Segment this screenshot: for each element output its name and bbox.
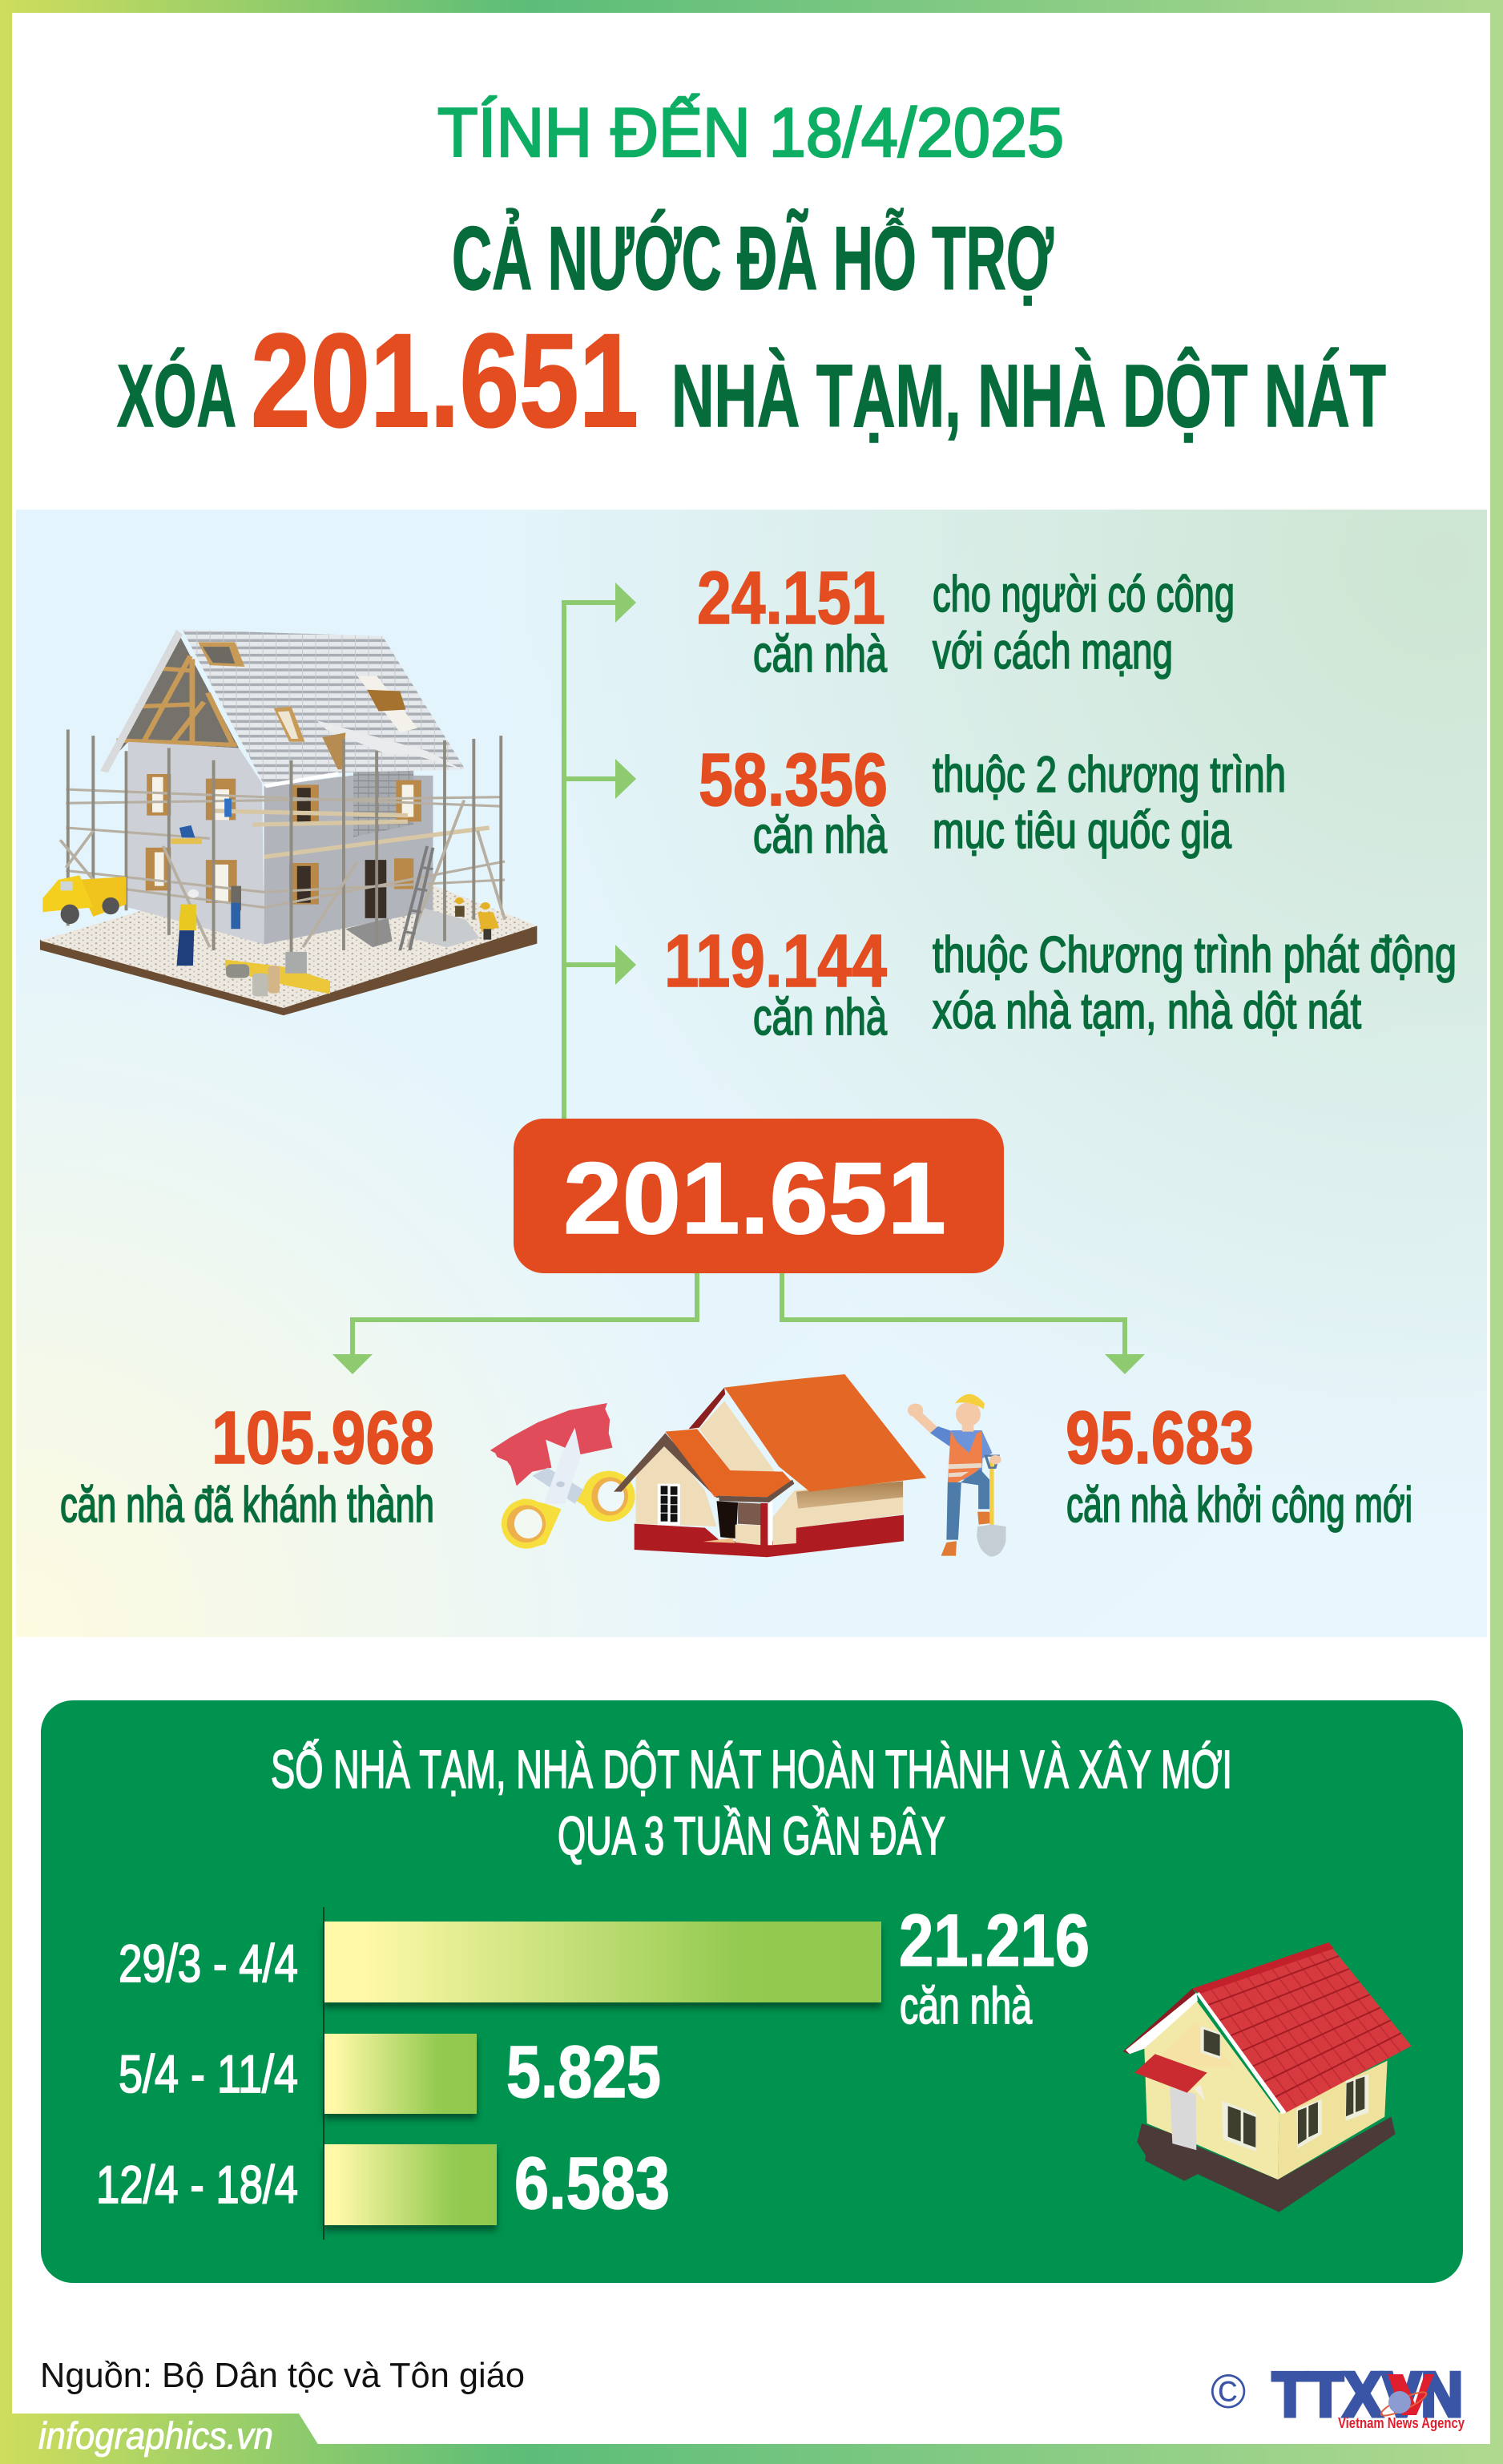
title [117, 95, 1386, 455]
bar 1 value: căn nhà [900, 1977, 1032, 2035]
stat: completed: căn nhà đã khánh thành [60, 1478, 434, 1533]
bar 1 value: 21.216 [899, 1900, 1090, 1982]
title line: remove 201.651: 201.651 [251, 307, 639, 455]
row: 24.151: 24.151 [697, 556, 885, 639]
icon: ribbon, house and worker [490, 1374, 1006, 1557]
bar 2 [324, 2034, 477, 2114]
connector: right branch [782, 1273, 1145, 1374]
bar 1 value [899, 1900, 1090, 2035]
icon: house with red roof [1123, 1942, 1412, 2212]
total box [514, 1119, 1004, 1273]
source note: Nguồn: Bộ Dân tộc và Tôn giáo [40, 2356, 525, 2395]
bar 1 [324, 1922, 881, 2002]
row: 119.144: xóa nhà tạm, nhà dột nát [933, 983, 1361, 1039]
icon: worker with shovel [908, 1394, 1006, 1557]
chart title: QUA 3 TUẦN GẦN ĐÂY [558, 1806, 945, 1866]
bar 3 [324, 2144, 497, 2225]
bar 3 label: 12/4 - 18/4 [96, 2155, 298, 2214]
logo: TTXVN [1211, 2359, 1465, 2431]
total box: 201.651 [563, 1141, 946, 1255]
chart axis [323, 1907, 324, 2240]
stat: completed: 105.968 [212, 1396, 434, 1479]
arrow: row 1 [615, 583, 636, 623]
row: 119.144 [664, 919, 1457, 1046]
row: 58.356: 58.356 [699, 738, 888, 821]
row: 58.356 [699, 738, 1286, 864]
row: 24.151: với cách mạng [933, 623, 1173, 680]
connector: left branch [332, 1273, 697, 1374]
row: 58.356: mục tiêu quốc gia [933, 803, 1232, 859]
connector: tree from total to three groups [564, 583, 636, 1119]
title line: date: TÍNH ĐẾN 18/4/2025 [437, 95, 1064, 171]
bar 3 value: 6.583 [514, 2143, 670, 2224]
wordmark: TTXVN [1272, 2359, 1463, 2430]
stat: newly started: 95.683 [1066, 1396, 1254, 1479]
stat: completed [60, 1396, 434, 1533]
panel: breakdown [16, 510, 1487, 1637]
arrow: row 3 [615, 945, 636, 985]
title line: remove 201.651: XÓA [117, 347, 236, 446]
bar chart [96, 1900, 1090, 2240]
title line: nationwide support: CẢ NƯỚC ĐÃ HỖ TRỢ [452, 208, 1054, 309]
bar 1 label: 29/3 - 4/4 [119, 1934, 298, 1993]
row: 119.144: 119.144 [664, 919, 887, 1002]
icon: house under construction [40, 630, 537, 1015]
row: 58.356: căn nhà [753, 806, 887, 864]
panel: weekly chart [41, 1700, 1463, 2283]
icon: scissors and ribbon [490, 1403, 635, 1549]
stat: newly started [1066, 1396, 1412, 1533]
icon: house with orange roof [614, 1374, 926, 1557]
bar 2 value: 5.825 [506, 2031, 661, 2113]
title line: remove 201.651 [117, 307, 1386, 455]
arrow: row 2 [615, 759, 636, 799]
footer tab: infographics.vn [38, 2414, 273, 2457]
row: 58.356: thuộc 2 chương trình [933, 747, 1286, 803]
chart title [271, 1739, 1232, 1866]
row: 24.151: căn nhà [753, 625, 887, 683]
bar 2 label: 5/4 - 11/4 [119, 2044, 298, 2103]
copyright mark: © [1211, 2365, 1246, 2418]
row: 24.151: cho người có công [933, 567, 1235, 623]
row: 119.144: căn nhà [753, 988, 887, 1046]
agency name: Vietnam News Agency [1338, 2415, 1465, 2431]
row: 24.151 [697, 556, 1235, 683]
